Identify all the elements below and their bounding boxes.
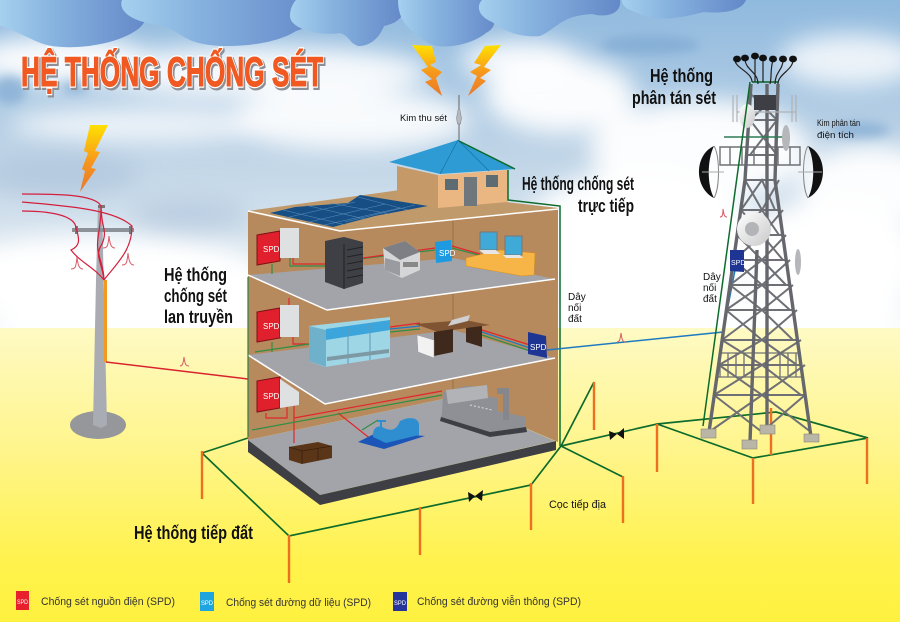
label: grounding system: Hệ thống tiếp đất [134,523,253,543]
legend: telecom SPD: SPD [394,601,407,607]
small dishes [739,104,801,275]
internal wiring [248,246,530,443]
top lights [733,53,797,62]
solar panels [270,195,428,227]
label: earth wire building: đất [568,313,582,325]
label: charge dissipation needle: điện tích [817,130,854,141]
pump [358,418,425,449]
tower feet [701,425,819,449]
building [248,140,558,505]
power lines [22,194,132,280]
tower top platform [733,58,796,122]
roof house [389,140,515,208]
industrial machine [440,385,527,437]
direct lightning ground wire [459,141,560,446]
tower SPD: SPD [731,260,745,267]
SPD panels: SPD [263,245,280,254]
data cabinets [309,317,390,367]
printer [383,241,420,278]
ground background [0,328,900,622]
label: direct lightning system [522,174,634,216]
label: transmission system: phân tán sét [632,88,716,108]
label: direct lightning system: Hệ thống chống sét [522,174,634,194]
icon: lightning rod [456,95,462,142]
label: earth wire building: nối [568,302,581,314]
storm clouds [0,0,746,47]
legend: data SPD: SPD [201,601,214,607]
floor 1 [248,258,555,310]
ground grid wires [202,382,868,536]
SPD panels: SPD [263,322,280,331]
tower lattice [709,95,811,432]
title: HỆ THỐNG CHỐNG SÉT [21,47,323,95]
large dish [737,212,771,246]
label: earth wire building: Dây [568,292,586,303]
tower surge symbol [720,209,727,217]
label: propagation system: lan truyền [164,307,233,327]
green crossbar [724,136,790,138]
power feed line [106,362,248,379]
data SPD [435,240,456,263]
icon: pole lightning bolt [80,125,108,192]
legend [16,591,581,611]
server rack [325,237,363,289]
label: ground rod: Cọc tiếp địa [549,499,607,511]
battery crate [289,442,332,464]
label: charge dissipation needle [817,118,860,141]
icon: lightning bolts above roof [412,45,501,96]
tower SPD [730,250,745,272]
telecom SPD [528,332,547,358]
tower legs [709,84,811,442]
label: transmission system [632,66,716,108]
label: propagation system [164,265,233,327]
label: propagation system: chống sét [164,286,227,306]
icon: grid connectors [468,428,624,502]
legend: power SPD: Chống sét nguồn điện (SPD) [41,596,175,608]
telecom SPD: SPD [530,343,547,352]
legend: telecom SPD [393,592,581,611]
data SPD: SPD [439,249,456,258]
title: HỆ THỐNG CHỐNG SÉT [21,47,323,95]
label: transmission system: Hệ thống [650,66,713,86]
surge symbol on telecom line [617,333,626,342]
left drum antenna [699,146,724,198]
label: earth wire tower: nối [703,282,716,294]
label: direct lightning system: trực tiếp [578,196,634,216]
label: lightning rod: Kim thu sét [400,113,448,123]
building walls [248,190,558,442]
tower ground wire [703,82,750,426]
label: earth wire tower: Dây [703,272,721,283]
ground floor [248,397,556,505]
label: propagation system: Hệ thống [164,265,227,285]
right drum antenna [798,146,823,198]
telecom line to tower [547,270,735,350]
legend: telecom SPD: Chống sét đường viễn thông (SPD) [417,595,581,608]
label: earth wire building [568,292,586,325]
label: earth wire tower [703,272,721,305]
label: charge dissipation needle: Kim phân tán [817,118,860,129]
office desk [415,315,490,358]
title [21,47,325,97]
ground stakes [202,382,867,583]
legend: power SPD: SPD [17,600,29,606]
floor 2 [248,330,555,404]
legend: power SPD [16,591,175,610]
SPD panels [257,228,299,412]
SPD panels: SPD [263,392,280,401]
power pole [70,205,134,439]
legend: data SPD: Chống sét đường dữ liệu (SPD) [226,597,371,609]
legend: data SPD [200,592,371,611]
label: earth wire tower: đất [703,293,717,305]
tower [699,53,823,449]
surge symbols near pole [71,236,189,366]
sky background [0,0,900,340]
orange desk [466,232,535,276]
title: HỆ THỐNG CHỐNG SÉT [22,49,325,97]
